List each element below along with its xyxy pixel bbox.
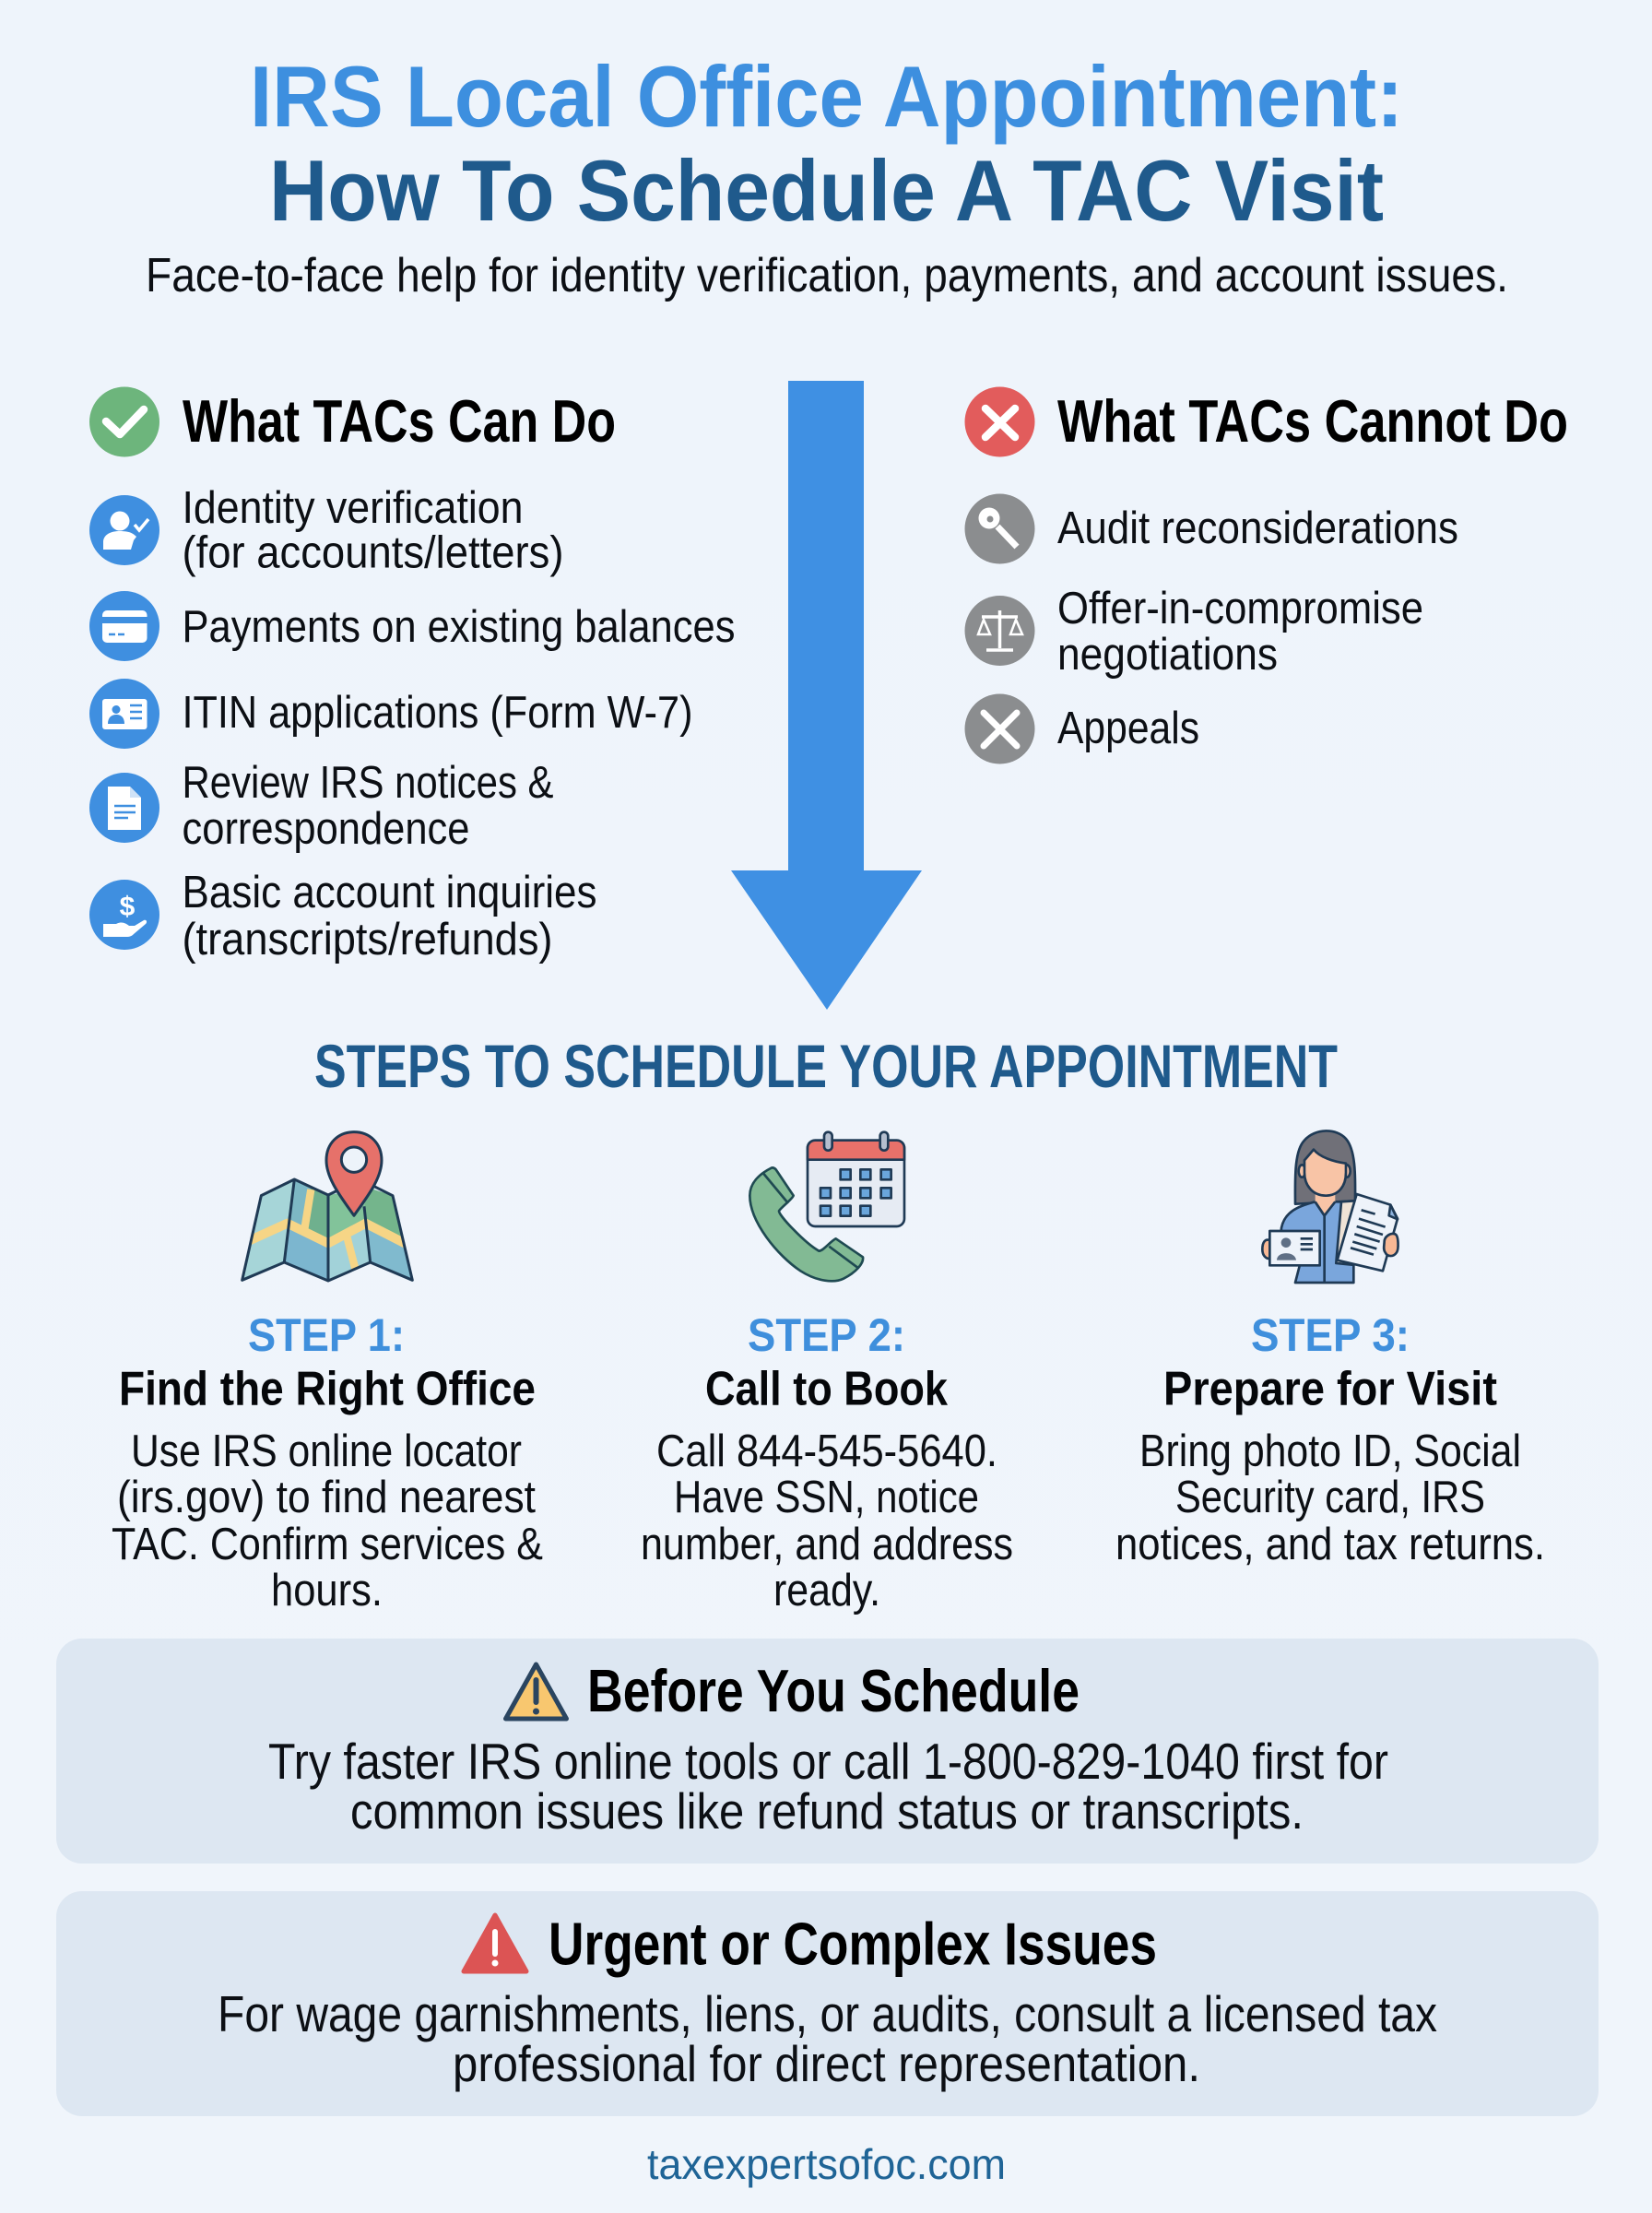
text: payments: Payments on existing balances bbox=[183, 602, 736, 652]
step 3 label: STEP 3: bbox=[1251, 1309, 1410, 1361]
panel: what TACs can do bbox=[89, 387, 736, 964]
panel background bbox=[56, 1891, 1599, 2116]
step 3 body: Security card, IRS bbox=[1175, 1473, 1485, 1522]
text: offer in compromise: negotiations bbox=[1057, 630, 1278, 680]
text: identity verification: Identity verification bbox=[183, 483, 524, 533]
text: basic inquiries: Basic account inquiries bbox=[183, 868, 597, 917]
text: review notices: Review IRS notices & bbox=[183, 758, 553, 808]
text: basic inquiries: (transcripts/refunds) bbox=[183, 915, 553, 964]
icon: dollar hand: $ bbox=[120, 892, 136, 922]
step 1 bbox=[112, 1132, 543, 1615]
icon: scales bbox=[964, 596, 1034, 666]
text: appeals: Appeals bbox=[1057, 704, 1199, 753]
heading: can do: What TACs Can Do bbox=[183, 387, 616, 455]
panel: what TACs cannot do bbox=[964, 387, 1568, 763]
step 1 body: TAC. Confirm services & bbox=[112, 1520, 543, 1569]
icon: map with pin bbox=[242, 1132, 412, 1281]
text: before you schedule: common issues like refund status or transcripts. bbox=[350, 1782, 1304, 1840]
icon: document bbox=[89, 773, 159, 843]
icon: red X bbox=[964, 387, 1034, 457]
icon: person with documents bbox=[1262, 1130, 1398, 1283]
arrow: down to steps bbox=[731, 381, 922, 1010]
step 2 label: STEP 2: bbox=[748, 1309, 905, 1361]
step 2 title: Call to Book bbox=[705, 1363, 948, 1416]
text: before you schedule: Try faster IRS online tools or call 1-800-829-1040 first for bbox=[268, 1733, 1388, 1790]
step 1 body: (irs.gov) to find nearest bbox=[117, 1473, 536, 1522]
step 2 bbox=[641, 1132, 1013, 1615]
text: offer in compromise: Offer-in-compromise bbox=[1057, 584, 1423, 633]
panel: urgent or complex issues bbox=[56, 1891, 1599, 2116]
title: IRS Local Office Appointment: bbox=[250, 48, 1403, 145]
text: before you schedule bbox=[268, 1733, 1388, 1840]
icon: green check bbox=[89, 387, 159, 457]
icon: gray X bbox=[964, 693, 1034, 763]
step 3 body: Bring photo ID, Social bbox=[1139, 1426, 1521, 1476]
step 3 body: notices, and tax returns. bbox=[1115, 1520, 1545, 1569]
step 1 title: Find the Right Office bbox=[119, 1363, 536, 1416]
step 1 body bbox=[112, 1426, 543, 1615]
text: identity verification bbox=[183, 483, 564, 577]
step 1 body: hours. bbox=[271, 1566, 383, 1615]
icon: dollar hand bbox=[89, 880, 159, 950]
text: review notices: correspondence bbox=[183, 804, 470, 854]
text: urgent bbox=[218, 1985, 1437, 2092]
heading: before you schedule: Before You Schedule bbox=[587, 1657, 1080, 1724]
text: review notices bbox=[183, 758, 553, 854]
step 2 body: Have SSN, notice bbox=[674, 1473, 979, 1522]
step 3 body bbox=[1115, 1426, 1545, 1569]
panel: before you schedule bbox=[56, 1639, 1599, 1864]
text: basic inquiries bbox=[183, 868, 597, 964]
text: identity verification: (for accounts/letters) bbox=[183, 527, 564, 577]
text: offer in compromise bbox=[1057, 584, 1423, 680]
step 2 body: number, and address bbox=[641, 1520, 1013, 1569]
heading: steps: STEPS TO SCHEDULE YOUR APPOINTMENT bbox=[314, 1032, 1338, 1100]
step 2 body bbox=[641, 1426, 1013, 1615]
icon: ID card bbox=[89, 679, 159, 749]
heading: urgent: Urgent or Complex Issues bbox=[549, 1911, 1157, 1977]
step 3 title: Prepare for Visit bbox=[1163, 1363, 1497, 1416]
text: audit: Audit reconsiderations bbox=[1057, 503, 1458, 553]
icon: red warning bbox=[464, 1915, 526, 1971]
step 2 body: ready. bbox=[773, 1566, 880, 1615]
icon: magnifier bbox=[964, 494, 1034, 564]
step 2 body: Call 844-545-5640. bbox=[656, 1426, 997, 1476]
footer url: taxexpertsofoc.com bbox=[647, 2140, 1006, 2188]
subtitle: Face-to-face help for identity verification, payments, and account issues. bbox=[146, 249, 1508, 302]
step 1 label: STEP 1: bbox=[248, 1309, 405, 1361]
text: ITIN: ITIN applications (Form W-7) bbox=[183, 688, 693, 738]
step 1 body: Use IRS online locator bbox=[131, 1426, 522, 1476]
icon: phone and calendar bbox=[749, 1132, 904, 1281]
icon: person verified bbox=[89, 495, 159, 565]
step 3 bbox=[1115, 1130, 1545, 1569]
text: urgent: For wage garnishments, liens, or audits, consult a licensed tax bbox=[218, 1985, 1437, 2042]
text: urgent: professional for direct representation. bbox=[453, 2035, 1200, 2092]
title: How To Schedule A TAC Visit bbox=[269, 142, 1384, 239]
panel background bbox=[56, 1639, 1599, 1864]
icon: yellow warning bbox=[505, 1664, 566, 1719]
icon: payment card bbox=[89, 591, 159, 661]
title bbox=[250, 48, 1403, 239]
